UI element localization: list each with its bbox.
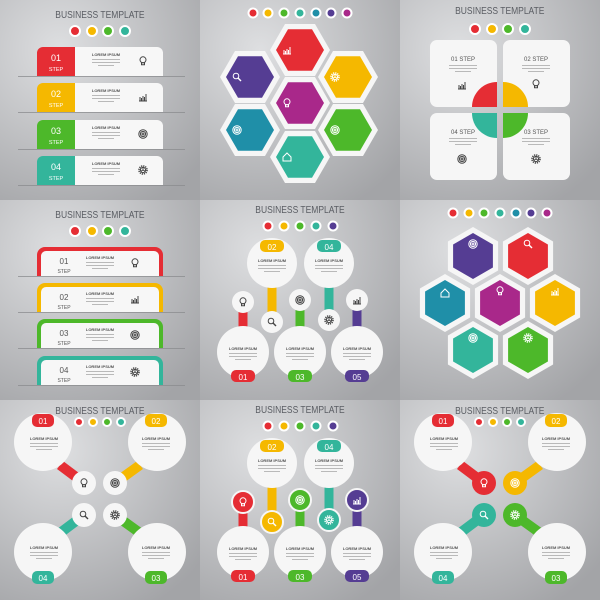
panel: four squares [430, 5, 570, 180]
step 03: STEP [49, 140, 64, 146]
hex magenta [475, 274, 525, 332]
title: BUSINESS TEMPLATE [455, 5, 544, 16]
bottom circles: LOREM IPSUM [286, 546, 315, 551]
step 04: STEP [57, 378, 71, 384]
circle 02 [247, 438, 297, 488]
step 03: LOREM IPSUM [92, 125, 121, 130]
icons and labels: LOREM IPSUM [542, 545, 571, 550]
icons and labels [30, 414, 171, 584]
color dots [75, 418, 125, 426]
color dots [264, 422, 338, 430]
icons and labels: LOREM IPSUM [142, 545, 171, 550]
connectors [243, 480, 357, 535]
color dots [448, 208, 552, 218]
title: BUSINESS TEMPLATE [55, 209, 145, 220]
icons and labels [430, 414, 571, 584]
step 02 [18, 83, 185, 112]
quadrant circle [472, 82, 528, 138]
color dots [70, 26, 130, 36]
circle 04 [304, 238, 354, 288]
hex teal [270, 131, 330, 183]
circle 02: LOREM IPSUM [258, 458, 287, 463]
icons and labels: LOREM IPSUM [142, 436, 171, 441]
step 04: LOREM IPSUM [92, 161, 121, 166]
square texts: 04 STEP [451, 130, 475, 136]
icons and labels: LOREM IPSUM [30, 545, 59, 550]
bottom circles: 03 [296, 373, 305, 382]
squares [430, 40, 570, 180]
circle 02: LOREM IPSUM [258, 258, 287, 263]
step 01 [18, 247, 185, 276]
square texts [449, 57, 550, 163]
color dots [475, 418, 525, 426]
hex yellow [530, 274, 580, 332]
step 02: LOREM IPSUM [92, 88, 121, 93]
panel: five circles tree [217, 204, 383, 382]
panel: hexagon cluster pointy [420, 208, 580, 379]
step 02: STEP [57, 305, 71, 311]
panel: five circles colored icons [217, 404, 383, 582]
hex green [503, 321, 553, 379]
square texts: 02 STEP [524, 57, 548, 63]
color dots [248, 8, 352, 18]
step 03: 03 [51, 126, 61, 136]
square texts: 03 STEP [524, 130, 548, 136]
step 03 [18, 319, 185, 348]
step 04 [18, 356, 185, 386]
step 01: 01 [51, 53, 61, 63]
color dots [70, 226, 130, 236]
bottom circles [217, 526, 383, 582]
bottom circles: 05 [353, 373, 362, 382]
connectors [60, 465, 140, 533]
hex red [270, 24, 330, 76]
bottom circles: LOREM IPSUM [343, 346, 372, 351]
connectors [460, 465, 540, 533]
circles [14, 413, 186, 581]
circle 02 [247, 238, 297, 288]
circle 04: 04 [325, 243, 334, 252]
hex green [318, 104, 378, 156]
circle 04 [304, 438, 354, 488]
square texts: 01 STEP [451, 57, 475, 63]
panel: step bars outlined [18, 209, 185, 386]
icons and labels: LOREM IPSUM [430, 436, 459, 441]
title: BUSINESS TEMPLATE [255, 204, 345, 215]
step 04: STEP [49, 176, 64, 182]
hex purple [448, 227, 498, 285]
step 04: 04 [60, 366, 69, 375]
connectors [243, 280, 357, 335]
step 03: STEP [57, 341, 71, 347]
panel: step bars solid [18, 9, 185, 186]
hex teal [448, 321, 498, 379]
icons and labels: 03 [552, 574, 561, 583]
step 01: LOREM IPSUM [86, 255, 115, 260]
circle 04: 04 [325, 443, 334, 452]
step 03: 03 [60, 329, 69, 338]
hex red [503, 227, 553, 285]
icons and labels: 03 [152, 574, 161, 583]
icons and labels: 04 [39, 574, 48, 583]
step 03: LOREM IPSUM [86, 327, 115, 332]
icon circles colored [232, 489, 368, 533]
hex blue [420, 274, 470, 332]
circle 02: 02 [268, 243, 277, 252]
icons and labels: 04 [439, 574, 448, 583]
color dots [470, 24, 530, 34]
hex blue [220, 104, 280, 156]
color dots [264, 222, 338, 230]
icon circles [232, 289, 368, 333]
panel: four circles cross [14, 405, 186, 584]
step 01: STEP [49, 67, 64, 73]
title: BUSINESS TEMPLATE [455, 405, 544, 416]
circles [414, 413, 586, 581]
bottom circles: LOREM IPSUM [343, 546, 372, 551]
hex purple [220, 51, 280, 103]
title: BUSINESS TEMPLATE [55, 9, 145, 20]
icons and labels: LOREM IPSUM [542, 436, 571, 441]
hex magenta [270, 77, 330, 129]
circle 04: LOREM IPSUM [315, 258, 344, 263]
bottom circles: 03 [296, 573, 305, 582]
step 04: LOREM IPSUM [86, 364, 115, 369]
step 01: LOREM IPSUM [92, 52, 121, 57]
bottom circles: LOREM IPSUM [286, 346, 315, 351]
step 04: 04 [51, 162, 61, 172]
title: BUSINESS TEMPLATE [255, 404, 345, 415]
bottom circles: LOREM IPSUM [229, 546, 258, 551]
bottom circles: 01 [239, 573, 248, 582]
hex yellow [318, 51, 378, 103]
icons and labels: 01 [39, 417, 48, 426]
bottom circles [217, 326, 383, 382]
step 02: STEP [49, 103, 64, 109]
icons and labels: LOREM IPSUM [30, 436, 59, 441]
step 02: 02 [60, 293, 69, 302]
panel: four circles cross colored [414, 405, 586, 584]
bottom circles: 05 [353, 573, 362, 582]
panel: hexagon cluster flat [220, 8, 378, 183]
circle 04: LOREM IPSUM [315, 458, 344, 463]
bottom circles: LOREM IPSUM [229, 346, 258, 351]
step 02 [18, 283, 185, 312]
step 01 [18, 47, 185, 76]
circle 02: 02 [268, 443, 277, 452]
step 02: 02 [51, 89, 61, 99]
icons and labels: 01 [439, 417, 448, 426]
step 04 [18, 156, 185, 186]
icons and labels: 02 [552, 417, 561, 426]
title: BUSINESS TEMPLATE [55, 405, 145, 416]
step 03 [18, 120, 185, 150]
icons and labels: LOREM IPSUM [430, 545, 459, 550]
bottom circles: 01 [239, 373, 248, 382]
step 02: LOREM IPSUM [86, 291, 115, 296]
step 01: STEP [57, 269, 71, 275]
step 01: 01 [60, 257, 69, 266]
icons and labels: 02 [152, 417, 161, 426]
